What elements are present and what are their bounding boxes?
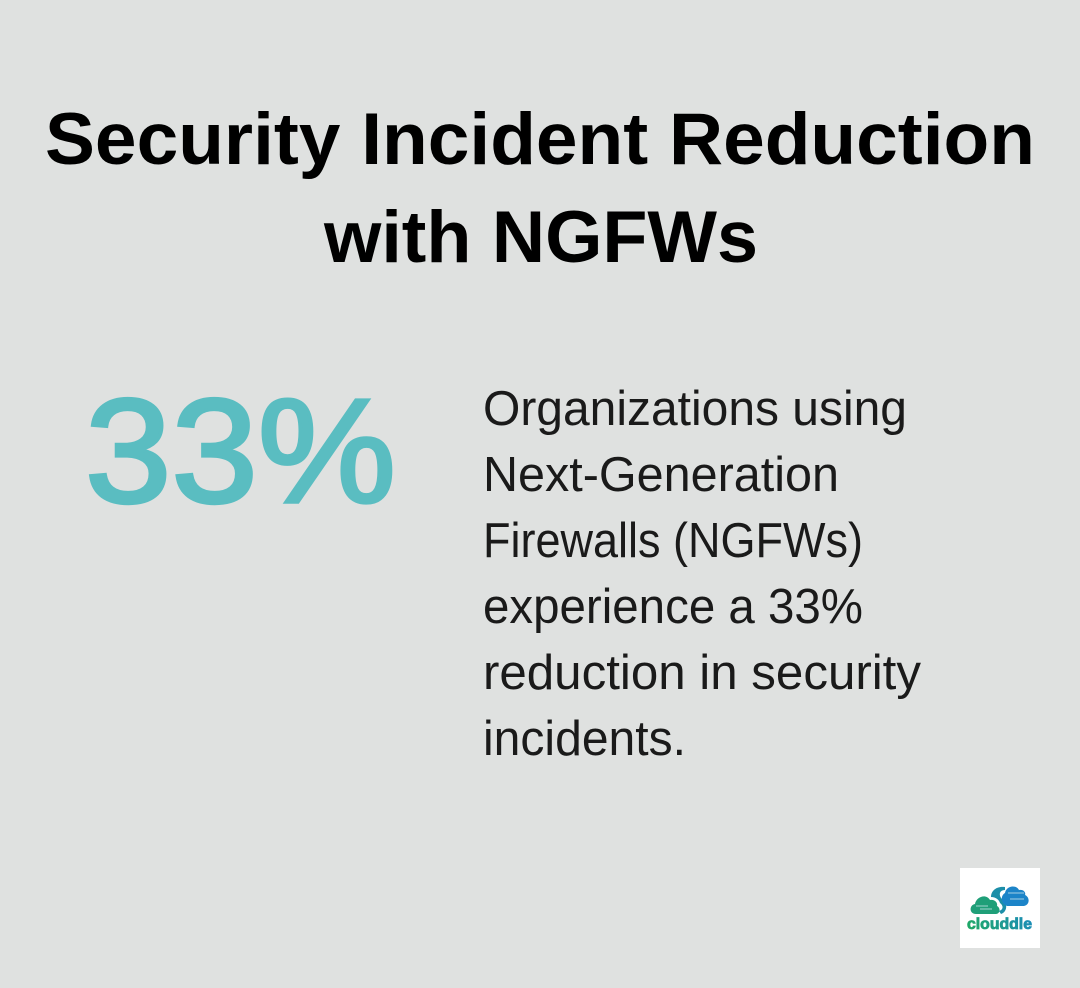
description text: experience a 33% bbox=[483, 580, 863, 634]
big statistic: 33%: 33% bbox=[85, 369, 396, 534]
title: with NGFWs bbox=[323, 197, 758, 278]
description text: incidents. bbox=[483, 712, 686, 766]
logo background bbox=[960, 868, 1040, 948]
description text: reduction in security bbox=[483, 646, 921, 700]
circuit lines bbox=[976, 893, 1024, 909]
swoosh bbox=[991, 887, 1006, 914]
description text bbox=[483, 382, 921, 766]
left cloud bbox=[971, 896, 1000, 914]
description text: Firewalls (NGFWs) bbox=[483, 514, 863, 568]
title bbox=[45, 99, 1035, 278]
right cloud bbox=[1002, 886, 1029, 906]
title: Security Incident Reduction bbox=[45, 99, 1035, 180]
description text: Next-Generation bbox=[483, 448, 839, 502]
logo: clouddle bbox=[960, 868, 1040, 948]
logo wordmark: clouddle bbox=[967, 916, 1032, 933]
description text: Organizations using bbox=[483, 382, 907, 436]
icon: clouds bbox=[971, 886, 1029, 914]
